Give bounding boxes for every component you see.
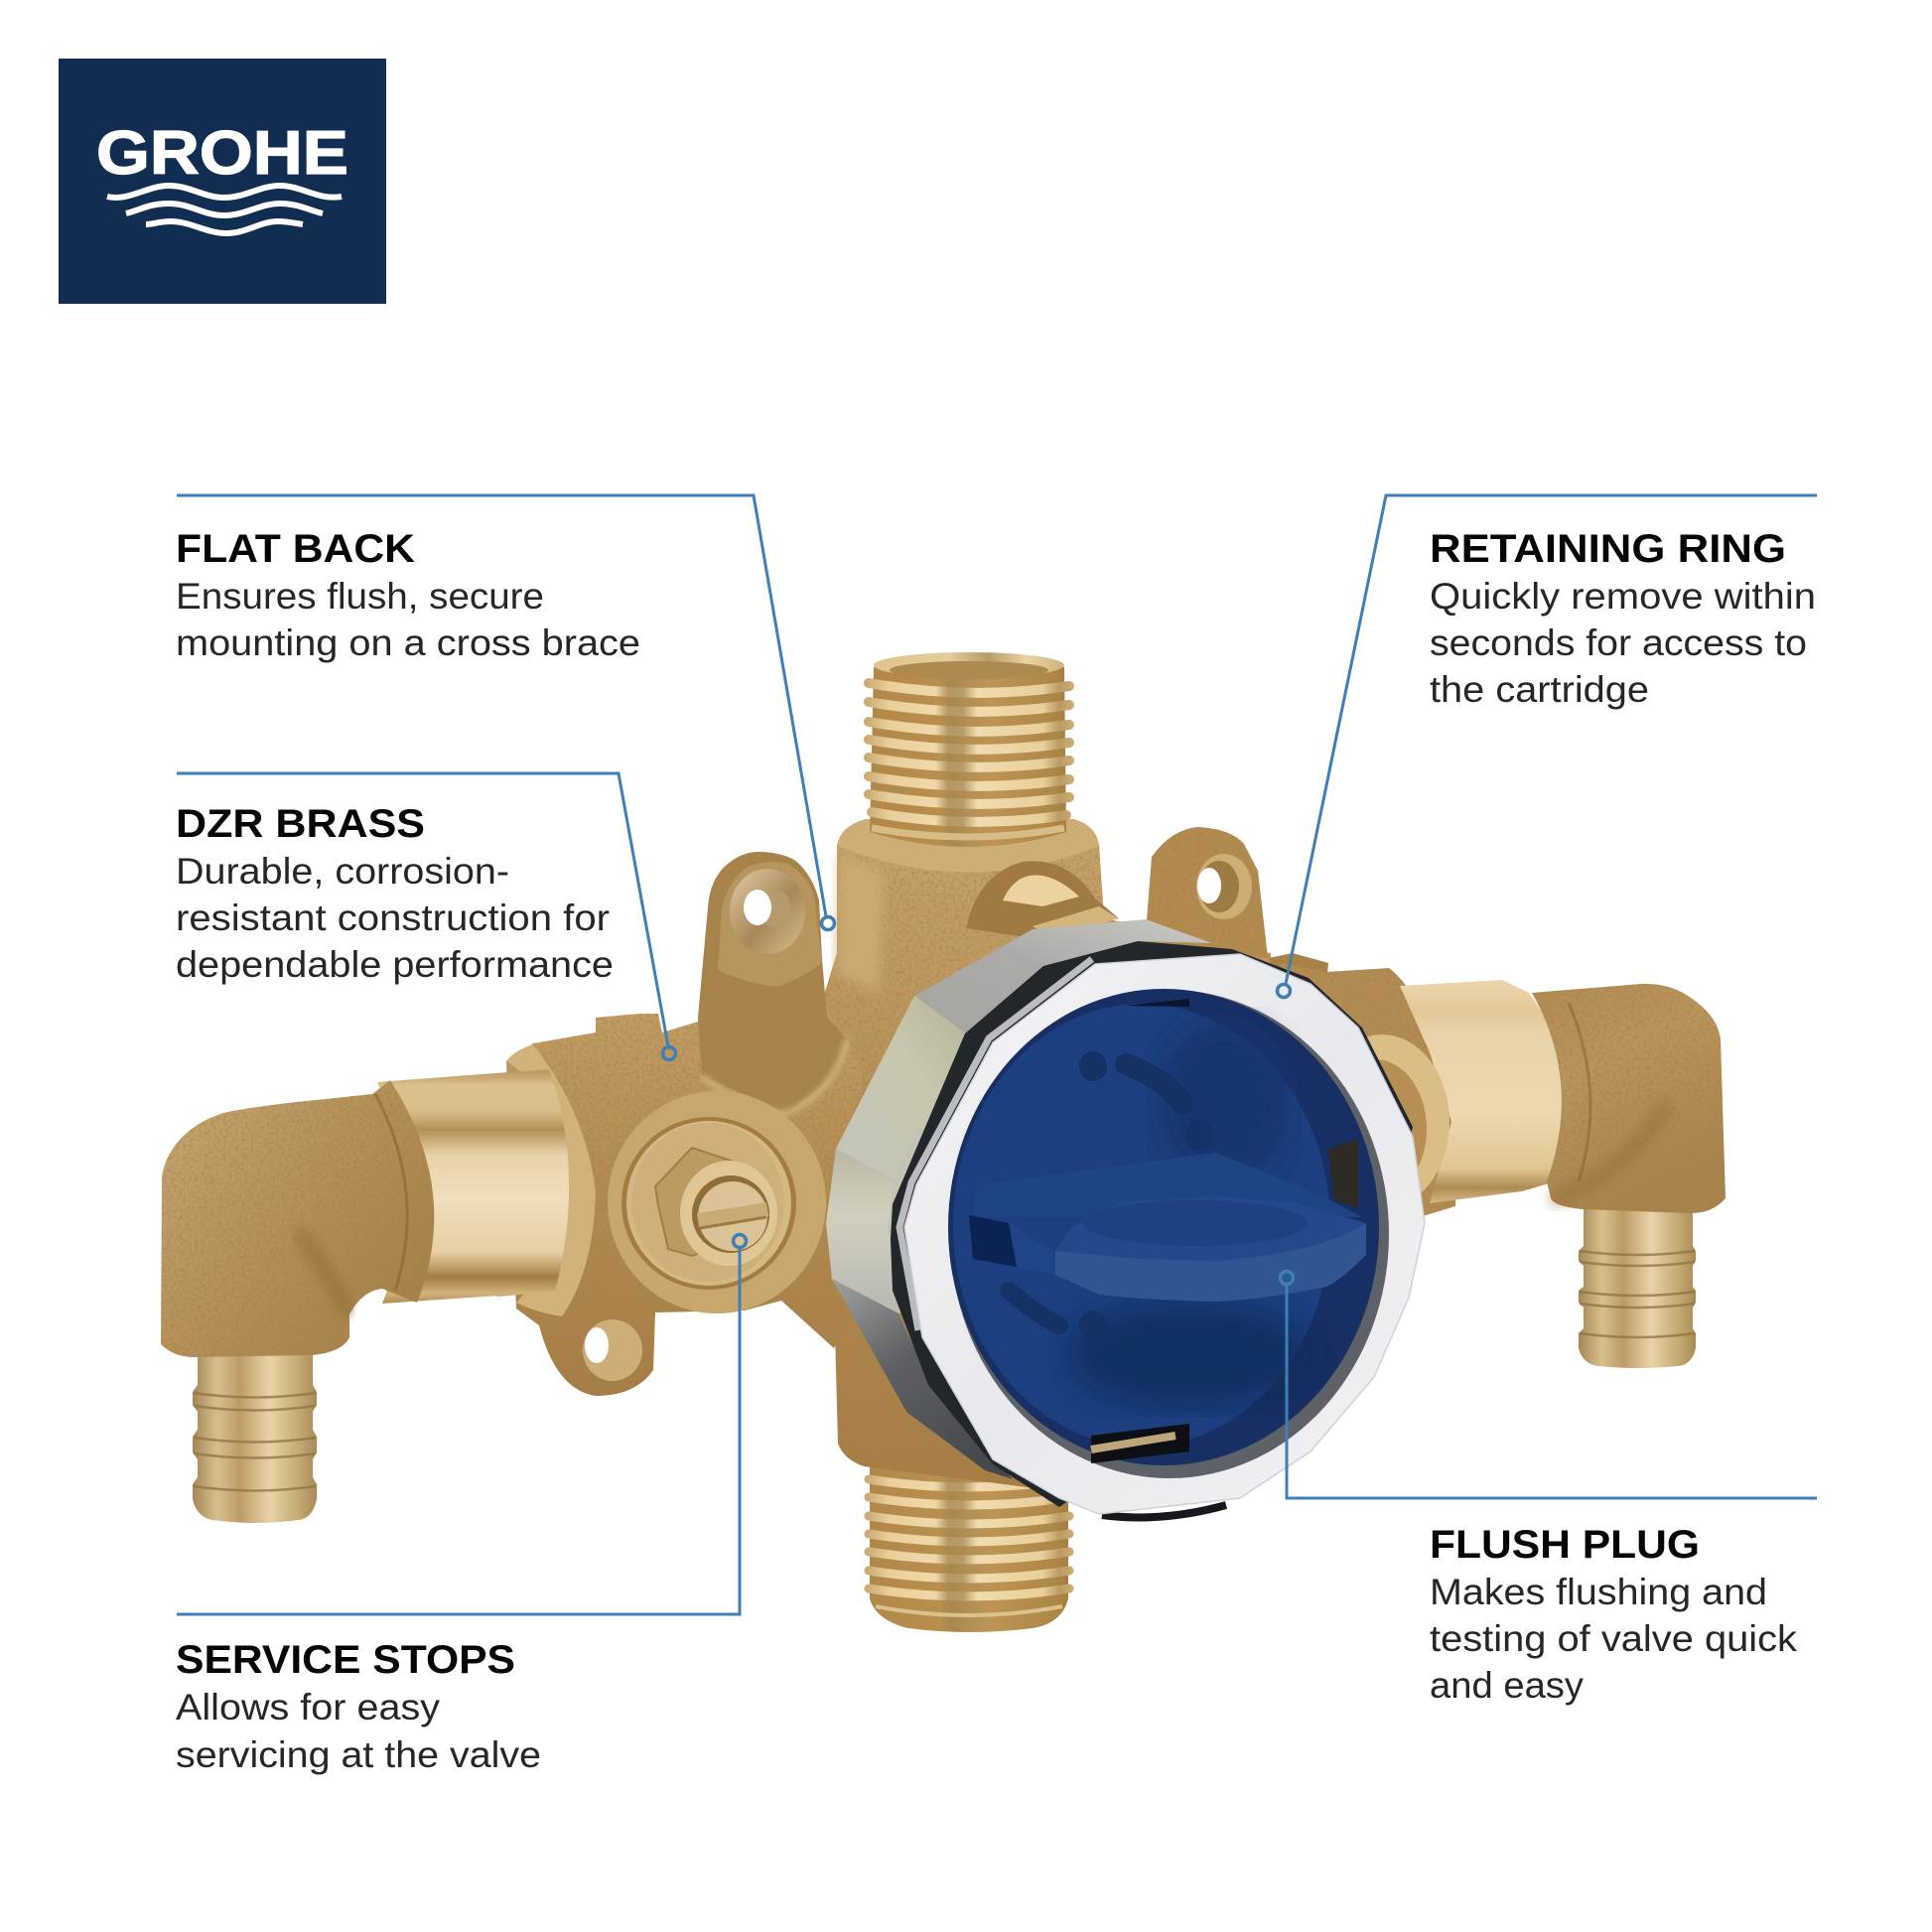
top brushed face: [914, 919, 1212, 1035]
left body: [506, 965, 864, 1396]
upper right ear hole: [1197, 868, 1221, 903]
flat back heading: FLAT BACK: [176, 527, 415, 571]
silver sliver beside ring: [899, 959, 1092, 1330]
recess rim: [950, 990, 1389, 1478]
DZR description: dependable performance: [176, 944, 614, 985]
product: brass rough-in valve: [161, 652, 1725, 1632]
left cylinder highlight: [836, 854, 884, 993]
left face: [826, 1149, 898, 1313]
flush plug description: [1430, 1572, 1798, 1706]
left smooth pipe: [377, 1069, 569, 1304]
left PEX tip: [193, 1350, 317, 1523]
handle ring side: [1055, 1223, 1366, 1302]
DZR marker: [663, 1046, 675, 1060]
right PEX tip: [1579, 1203, 1696, 1368]
ear hole: [744, 890, 771, 925]
retaining ring description: [1430, 576, 1816, 710]
DZR description: Durable, corrosion-: [176, 851, 509, 892]
elbows: [161, 984, 1725, 1357]
plug handle shelf: [973, 1153, 1362, 1217]
mid face filler: [889, 941, 1138, 1313]
flush plug marker: [1281, 1271, 1293, 1285]
upper right ear: [1147, 827, 1268, 958]
handle left bar: [1009, 1223, 1055, 1275]
service stops leader line: [177, 1248, 740, 1614]
flush plug description: Makes flushing and: [1430, 1572, 1767, 1612]
head slot band: [698, 1209, 767, 1220]
flush plug heading: FLUSH PLUG: [1430, 1523, 1700, 1567]
right boss: [1281, 963, 1459, 1226]
callout: flat back: [176, 495, 834, 929]
central vertical body: [794, 844, 1281, 1489]
flat back description: [176, 576, 640, 663]
callout: DZR brass: [176, 773, 675, 1060]
lower dark face: [832, 1279, 1013, 1479]
callout: service stops: [176, 1235, 747, 1775]
cylinder top plane: [837, 819, 1099, 872]
service stops description: servicing at the valve: [176, 1734, 541, 1775]
bottom metal clip: [1091, 1424, 1189, 1463]
DZR description: [176, 851, 614, 985]
callout: retaining ring: [1277, 495, 1817, 997]
upper right ear chamfer: [1196, 854, 1252, 919]
top slot: [1126, 999, 1189, 1007]
raised dots and slots: [1009, 1051, 1213, 1340]
head slot line: [700, 1217, 766, 1228]
slotted head: [698, 1181, 767, 1251]
left pipe end: [496, 1069, 569, 1297]
handle ring top: [1055, 1196, 1366, 1261]
top threaded outlet: [869, 652, 1069, 847]
DZR leader line: [177, 773, 668, 1046]
lower ear hole: [585, 1327, 609, 1363]
retaining tab: [1269, 953, 1328, 985]
ear thread: [761, 890, 791, 929]
flat back description: mounting on a cross brace: [176, 622, 640, 663]
logo wordmark: GROHE: [96, 119, 348, 188]
lower depression: [1070, 1304, 1309, 1407]
navy recess: [948, 989, 1379, 1465]
upper left ear stem: [698, 852, 847, 1113]
flush plug leader line: [1287, 1285, 1817, 1498]
logo: GROHE: [59, 59, 386, 304]
retaining ring description: seconds for access to: [1430, 622, 1807, 663]
service stop: [608, 1091, 826, 1313]
hex nut: [655, 1148, 755, 1256]
flush plug description: and easy: [1430, 1665, 1585, 1706]
DZR description: resistant construction for: [176, 897, 610, 938]
side port arch: [966, 861, 1119, 938]
upper right ear inner: [1199, 861, 1239, 912]
callout: flush plug: [1281, 1271, 1817, 1706]
flat back marker: [822, 917, 834, 929]
blue flush plug cap: [953, 999, 1366, 1463]
retaining ring marker: [1277, 985, 1291, 997]
flat back leader line: [177, 495, 826, 916]
right metal clip: [1328, 1139, 1358, 1208]
side port inner: [1003, 875, 1079, 906]
retaining ring description: Quickly remove within: [1430, 576, 1816, 617]
stop dark ring: [692, 1175, 769, 1253]
casting shading: [298, 1003, 1668, 1314]
upper depression: [1160, 1023, 1289, 1181]
retaining ring heading: RETAINING RING: [1430, 527, 1786, 571]
side port shelf: [1033, 906, 1119, 938]
right inner flange: [1314, 1035, 1449, 1209]
flush plug description: testing of valve quick: [1430, 1618, 1798, 1659]
stop collar: [680, 1161, 777, 1266]
handle dark notch: [969, 1215, 1017, 1267]
gasket bottom edge: [1102, 1505, 1226, 1517]
cast valve body: [506, 827, 1459, 1489]
retaining ring description: the cartridge: [1430, 669, 1649, 710]
left elbow: [161, 1080, 434, 1357]
ear smooth chamfer: [718, 862, 822, 987]
logo waves: [107, 186, 342, 233]
service stops heading: SERVICE STOPS: [176, 1638, 515, 1682]
service stops description: [176, 1687, 541, 1775]
flat back description: Ensures flush, secure: [176, 576, 544, 617]
DZR heading: DZR BRASS: [176, 802, 425, 846]
right elbow: [1532, 984, 1725, 1213]
upper left face: [836, 996, 969, 1180]
retaining nut hex body: [826, 919, 1212, 1479]
service stops description: Allows for easy: [176, 1687, 441, 1727]
ear countersink: [730, 869, 805, 954]
chrome retaining ring: [904, 954, 1425, 1514]
bottom threaded outlet: [869, 1459, 1069, 1632]
service stops marker: [733, 1235, 747, 1247]
left flange: [506, 1044, 596, 1316]
lower ear chamfer: [583, 1319, 642, 1381]
retaining ring leader line: [1286, 495, 1817, 984]
right smooth pipe: [1400, 980, 1571, 1203]
handle ring hole: [1083, 1200, 1308, 1246]
black gasket: [891, 941, 1413, 1507]
